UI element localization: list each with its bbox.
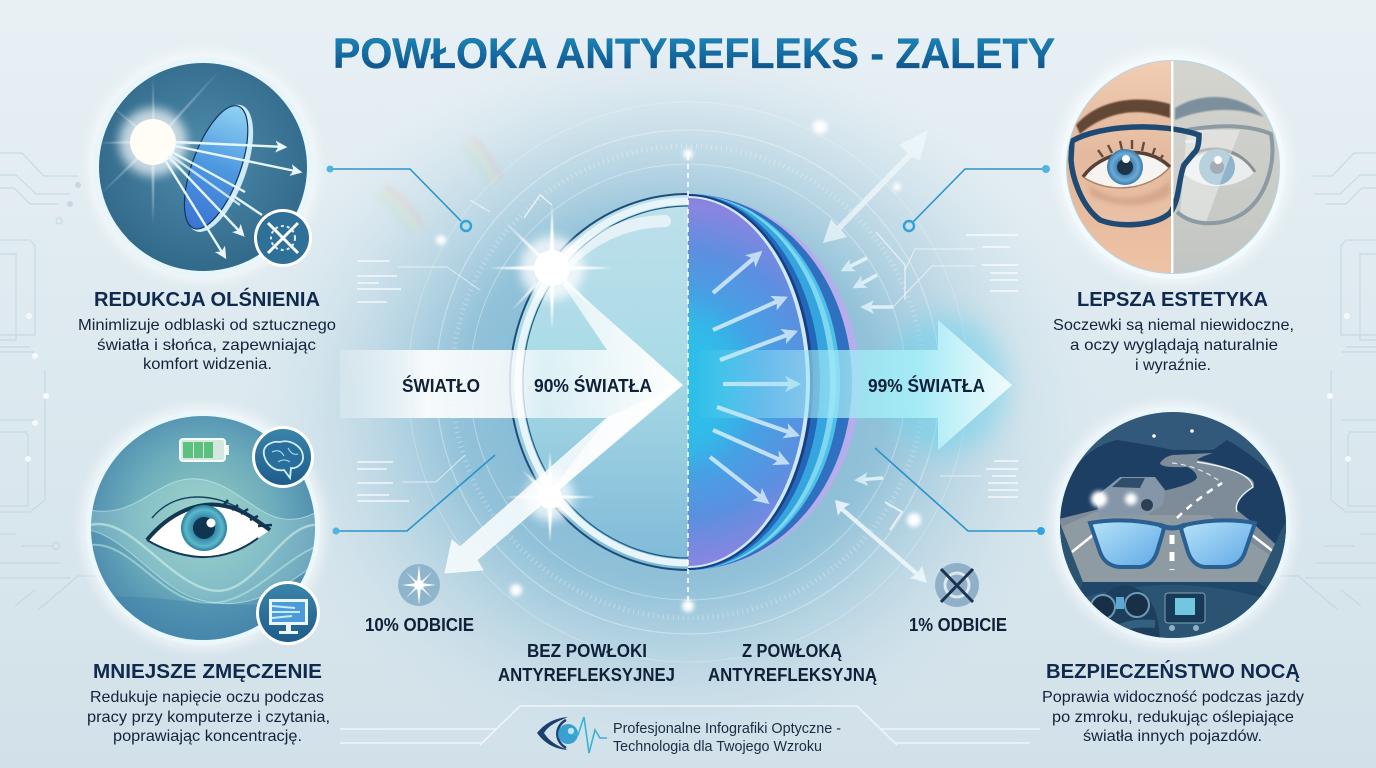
panel: bezpieczeństwo nocą [1042, 402, 1304, 745]
panel: mniejsze zmęczenie [80, 405, 330, 745]
illustration: relaxed eye [80, 405, 326, 651]
description [1053, 317, 1294, 374]
glare star top [490, 205, 612, 330]
label: światło: ŚWIATŁO [402, 375, 480, 396]
HUD rings around the central lens [408, 102, 968, 662]
icon: no glare badge [254, 209, 312, 267]
description: komfort widzenia. [143, 356, 272, 373]
panel: redukcja olśnienia [78, 51, 336, 373]
icon: brain badge [252, 426, 314, 488]
heading: REDUKCJA OLŚNIENIA [94, 287, 320, 311]
description: a oczy wyglądają naturalnie [1070, 337, 1278, 354]
glow dots [436, 120, 921, 612]
illustration: sun and lens [87, 51, 319, 283]
description: światła i słońca, zapewniając [97, 337, 316, 354]
label: 1% odbicie: 1% ODBICIE [909, 615, 1007, 635]
connector: bezpieczeństwo [875, 448, 1045, 535]
icon: 10% reflection star [398, 564, 440, 606]
footer text: Profesjonalne Infografiki Optyczne - [613, 721, 841, 737]
connector: zmęczenie [332, 455, 495, 534]
footer frame [340, 706, 1040, 745]
footer text [613, 721, 841, 755]
main arrow: light entering without coating [340, 270, 683, 508]
icon: 1% reflection crossed [935, 563, 979, 607]
description [87, 689, 330, 745]
central lens: without coating [509, 193, 688, 571]
logo: eye with heartbeat [537, 717, 607, 753]
footer text: Technologia dla Twojego Wzroku [613, 739, 822, 755]
heading: LEPSZA ESTETYKA [1077, 288, 1268, 311]
icon: glasses [1090, 520, 1255, 567]
caption: bez powłoki [498, 641, 675, 685]
microtext decoration right [893, 234, 1018, 498]
left circuit decoration [0, 153, 110, 610]
description: Poprawia widoczność podczas jazdy [1042, 689, 1304, 706]
label: 10% odbicie: 10% ODBICIE [365, 615, 474, 635]
description [78, 317, 336, 373]
description: pracy przy komputerze i czytania, [87, 709, 330, 726]
arrows inside coated lens [710, 253, 798, 502]
heading: BEZPIECZEŃSTWO NOCĄ [1046, 660, 1300, 683]
icon: monitor badge [256, 581, 320, 645]
rainbow lens flares [375, 138, 502, 234]
microtext decoration left [357, 260, 480, 502]
incoming small arrows at coated surface [843, 258, 893, 480]
label: 90% światła: 90% ŚWIATŁA [534, 375, 652, 396]
illustration: night driving [1050, 402, 1300, 660]
description: i wyraźnie. [1135, 357, 1211, 374]
caption: bez powłoki: ANTYREFLEKSYJNEJ [498, 665, 675, 685]
caption: z powłoką: ANTYREFLEKSYJNĄ [708, 665, 877, 685]
description: poprawiając koncentrację. [113, 728, 302, 745]
caption: z powłoką [708, 641, 877, 685]
reflected arrow top right [823, 130, 928, 243]
heading: MNIEJSZE ZMĘCZENIE [93, 660, 322, 683]
description: Redukuje napięcie oczu podczas [90, 689, 324, 706]
dashed divider [687, 155, 689, 605]
caption: bez powłoki: BEZ POWŁOKI [527, 641, 647, 661]
description: Soczewki są niemal niewidoczne, [1053, 317, 1294, 334]
main arrow: light through coating [700, 315, 1012, 455]
description: Minimlizuje odblaski od sztucznego [78, 317, 336, 334]
title: POWŁOKA ANTYREFLEKS - ZALETY [333, 30, 1055, 78]
panel: lepsza estetyka [1053, 49, 1294, 374]
description [1042, 689, 1304, 745]
caption: z powłoką: Z POWŁOKĄ [742, 641, 842, 661]
description: po zmroku, redukując oślepiające [1052, 709, 1294, 726]
glare star bottom [505, 452, 595, 542]
central lens: with coating [688, 194, 858, 570]
icon: battery [180, 439, 229, 461]
description: światła innych pojazdów. [1083, 728, 1262, 745]
illustration: eye with and without reflections [1055, 49, 1291, 285]
connector: estetyka [904, 165, 1050, 231]
reflected arrow bottom left [445, 385, 680, 573]
right circuit decoration [1266, 153, 1376, 610]
connector: olśnienie [326, 166, 471, 231]
label: 99% światła: 99% ŚWIATŁA [868, 375, 985, 396]
reflected arrow bottom right [835, 500, 927, 583]
